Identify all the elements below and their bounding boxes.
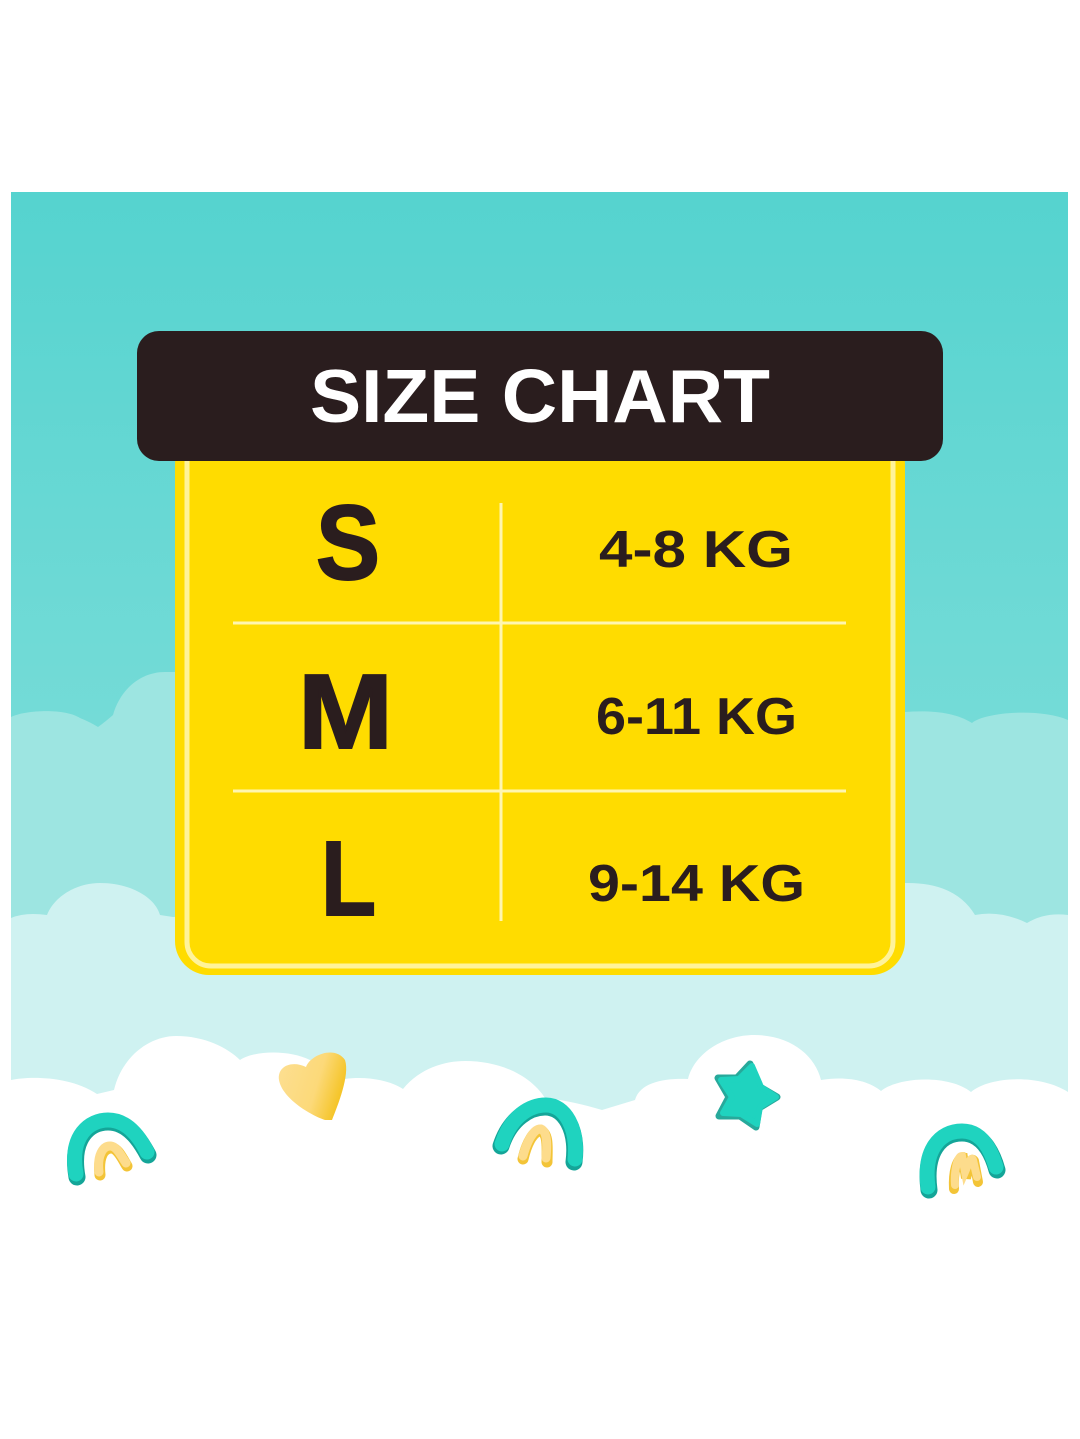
- icon: star: [718, 1064, 777, 1127]
- row: size S: 4-8 KG: [599, 521, 793, 579]
- row: size L: L: [321, 820, 376, 938]
- size table card: [175, 420, 905, 975]
- row: size S: [316, 484, 793, 602]
- header bar: [137, 331, 943, 461]
- icon: rainbow centre: [501, 1105, 575, 1162]
- row: size M: [298, 653, 797, 771]
- cloud layer: mid turquoise: [11, 672, 1068, 940]
- cloud layer: pale aqua: [11, 883, 1068, 1110]
- row: size L: [321, 820, 805, 938]
- row: size M: M: [298, 653, 393, 771]
- row: size S: S: [316, 484, 380, 602]
- table dividers: [233, 503, 846, 921]
- row: size L: 9-14 KG: [588, 855, 805, 913]
- icon: heart: [279, 1052, 346, 1120]
- icon: rainbow right: [927, 1131, 997, 1190]
- title: SIZE CHART: [310, 354, 770, 438]
- icon: rainbow left: [75, 1120, 148, 1177]
- row: size M: 6-11 KG: [596, 688, 797, 746]
- cloud layer: white foreground: [11, 1035, 1068, 1260]
- sky panel: [11, 192, 1068, 912]
